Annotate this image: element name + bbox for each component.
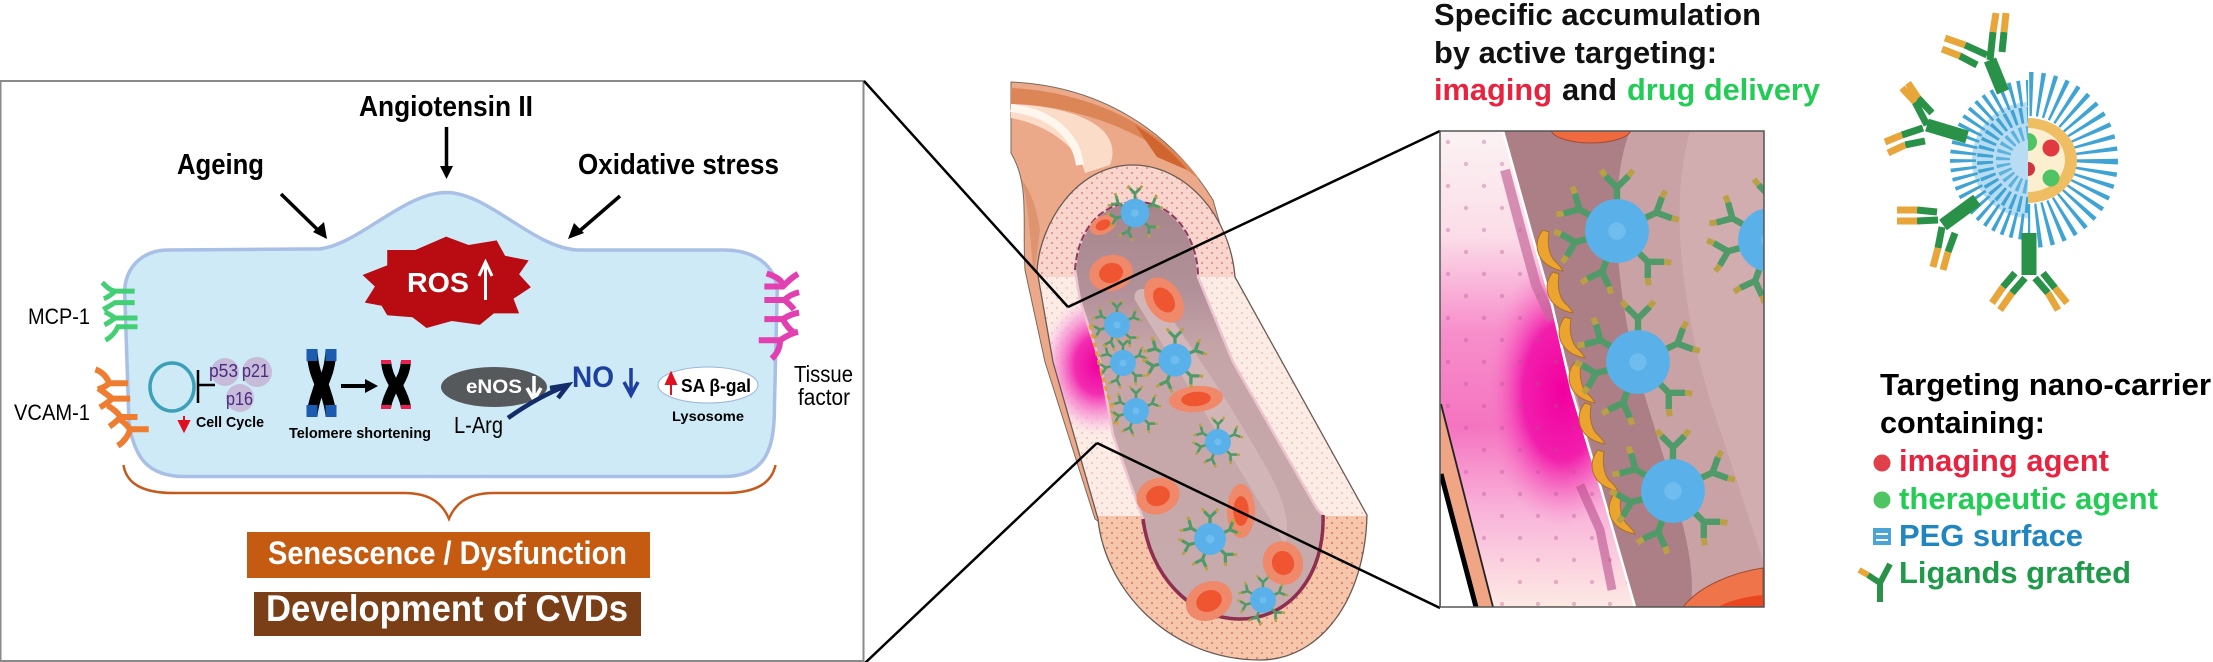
eNOS and NO: NO [572, 361, 614, 394]
label: MCP-1: MCP-1 [28, 304, 90, 329]
antibody: top ligand [1942, 13, 2006, 92]
lysosome SA beta-gal: SA β-gal [681, 376, 751, 396]
legend: targeting nano-carrier: Targeting nano-carrier [1880, 367, 2211, 402]
inset outer vessel edge [1441, 131, 1635, 607]
receptors: tissue factor [759, 273, 799, 359]
label: VCAM-1: VCAM-1 [14, 400, 90, 425]
legend: targeting nano-carrier [1859, 367, 2211, 602]
vessel wall outline [1037, 165, 1367, 660]
arrow: Oxidative stress to cell [568, 196, 620, 239]
PEG corona [1963, 93, 2097, 227]
accumulation hot spot [1050, 304, 1110, 432]
antibody: bottom ligand [1992, 233, 2067, 310]
legend item: Ligands grafted: Ligands grafted [1899, 555, 2131, 590]
inset border [1440, 131, 1764, 607]
heading: specific accumulation: by active targeting: [1434, 35, 1717, 70]
panel: endothelial cell senescence [0, 81, 864, 661]
legend: targeting nano-carrier: containing: [1880, 405, 2045, 440]
cell cycle with p53 p21 p16: p16 [226, 389, 253, 409]
vessel lumen [1075, 202, 1323, 619]
box: Senescence / Dysfunction: Senescence / Dysfunction [268, 535, 627, 571]
heading: Ageing: Ageing [177, 149, 264, 181]
heading: specific accumulation: drug delivery [1627, 72, 1821, 107]
receptors: VCAM-1 [95, 369, 149, 446]
heading: Angiotensin II: Angiotensin II [359, 91, 533, 123]
label: Tissue factor [794, 361, 853, 410]
heading: specific accumulation [1434, 0, 1821, 107]
ROS burst [363, 237, 531, 328]
zoom line: vessel to inset [1068, 131, 1440, 608]
cell cycle with p53 p21 p16 [150, 357, 272, 431]
heading: specific accumulation: imaging [1434, 72, 1552, 107]
receptors: MCP-1 [102, 283, 137, 340]
antibody: left ligand [1885, 83, 1967, 153]
inset lumen bands [1503, 115, 1763, 607]
arrow: Ageing to cell [281, 194, 327, 239]
heading: Oxidative stress: Oxidative stress [578, 149, 779, 181]
eNOS and NO: L-Arg [454, 412, 503, 438]
cell cycle with p53 p21 p16: p21 [242, 361, 269, 381]
telomere shortening [289, 349, 431, 442]
lysosome SA beta-gal: Lysosome [672, 408, 744, 424]
eNOS and NO [441, 361, 638, 438]
heading: specific accumulation: and [1562, 72, 1617, 107]
red blood cells [1085, 211, 1309, 628]
legend item: therapeutic agent: therapeutic agent [1899, 481, 2158, 516]
cell body [125, 192, 777, 477]
antibody: lower-left ligand [1897, 200, 1977, 270]
label: Tissue factor: Tissue [794, 361, 853, 387]
box: Development of CVDs: Development of CVDs [266, 588, 628, 629]
label: Tissue factor: factor [798, 384, 850, 410]
zoom line: vessel to cell panel [864, 81, 1097, 662]
vessel wall [1030, 160, 1375, 662]
nano-carrier diagram [1885, 13, 2097, 310]
arrow: Angiotensin II to cell [440, 127, 453, 179]
panel: magnified inset [1440, 132, 1764, 606]
inset vessel wall [1440, 131, 1640, 607]
ROS burst: ROS [407, 267, 469, 298]
carrier core cutaway [2028, 118, 2077, 203]
legend item: PEG surface: PEG surface [1899, 518, 2083, 553]
blood vessel cross-section [1011, 82, 1375, 662]
inset crescents: target receptors [1537, 230, 1635, 534]
curly brace [123, 465, 776, 519]
nanoparticles in lumen [1091, 186, 1288, 626]
eNOS and NO: eNOS [466, 377, 522, 398]
vessel upper tube [1011, 82, 1235, 530]
inset nanoparticles [1553, 168, 1764, 554]
legend item: Ligands grafted [1859, 555, 2131, 602]
lysosome SA beta-gal [658, 367, 758, 424]
telomere shortening: Telomere shortening [289, 425, 431, 442]
legend item: imaging agent: imaging agent [1899, 443, 2109, 478]
cell cycle with p53 p21 p16: p53 [209, 361, 238, 381]
cell cycle with p53 p21 p16: Cell Cycle [196, 414, 264, 431]
